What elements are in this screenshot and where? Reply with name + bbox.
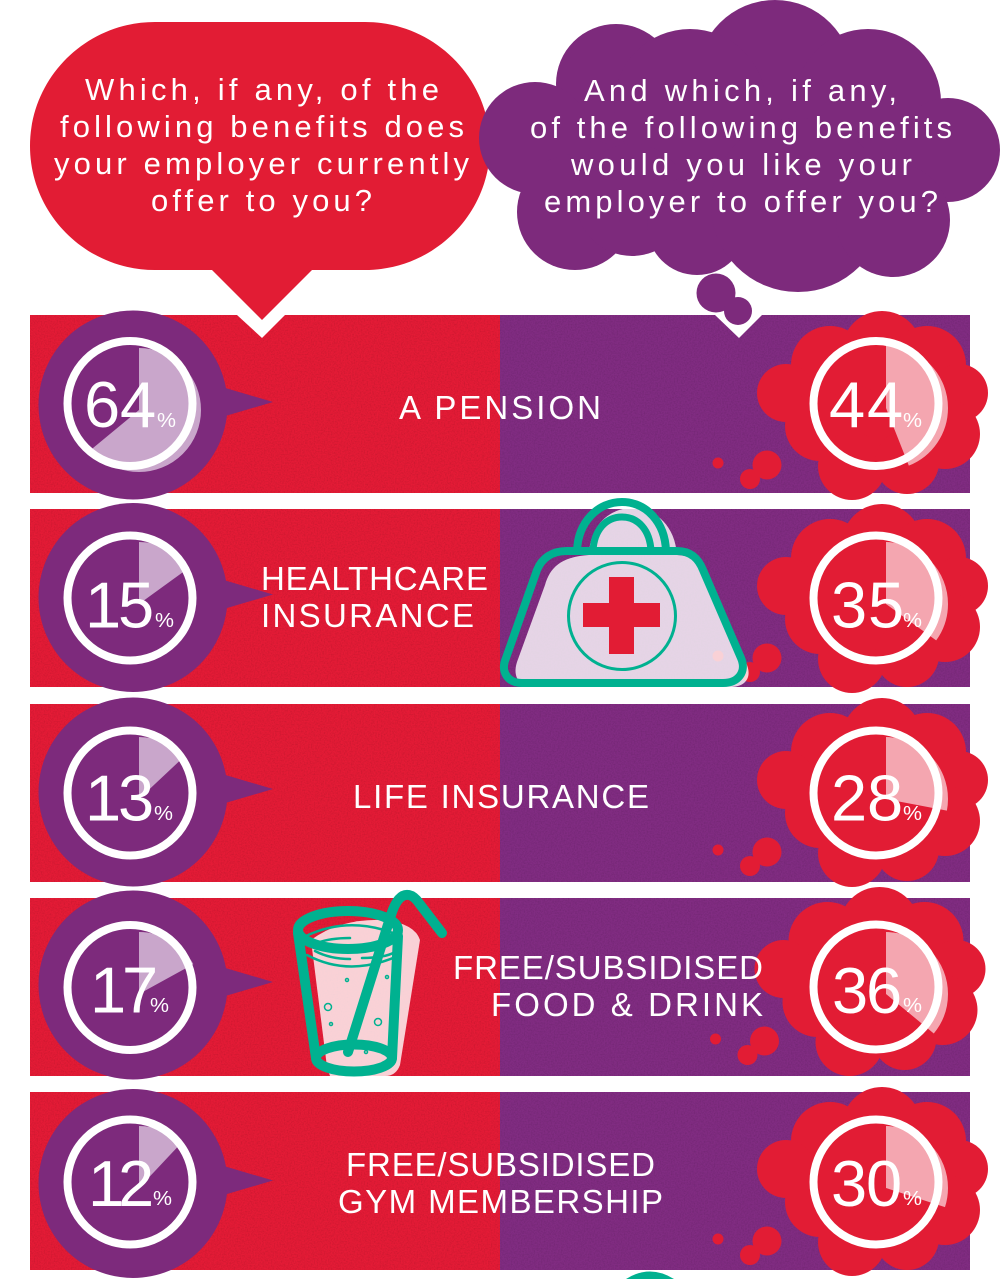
label: free or subsidised food and drink: FREE/SUBSIDISED: [453, 949, 763, 986]
panel: bands background: [30, 315, 970, 1270]
left stat: 64%: 64: [84, 368, 156, 441]
thought cloud: desired benefits question: [479, 0, 1000, 325]
left stat: 13%: [38, 698, 273, 886]
label: free or subsidised gym membership: FREE/SUBSIDISED: [346, 1146, 655, 1183]
question text: employer currently offers: your employer currently: [54, 146, 470, 181]
right stat: 28%: [712, 698, 988, 887]
right stat: 44%: [712, 311, 988, 500]
label: free or subsidised gym membership: [338, 1146, 663, 1220]
left stat: 17%: [38, 890, 273, 1080]
label: free or subsidised food and drink: FOOD & DRINK: [491, 986, 763, 1023]
label: healthcare insurance: INSURANCE: [261, 597, 474, 634]
question text: employer currently offers: [54, 72, 470, 218]
right stat: 36%: 36: [832, 954, 902, 1027]
right stat: 35%: 35: [831, 568, 904, 642]
right stat: 36%: [710, 887, 986, 1076]
row: healthcare insurance: [38, 502, 988, 693]
right stat: 35%: [712, 504, 988, 693]
question text: employer should offer: employer to offer you?: [544, 184, 938, 219]
left stat: 17%: 17: [90, 954, 158, 1027]
left stat: 13%: %: [154, 803, 173, 825]
question text: employer currently offers: Which, if any, of the: [85, 72, 439, 107]
icon: next row green arc: [626, 1272, 674, 1279]
question text: employer should offer: [530, 73, 952, 219]
question text: employer currently offers: offer to you?: [151, 183, 372, 218]
row: gym membership: [38, 1087, 988, 1278]
row: life insurance: [38, 698, 988, 887]
label: free or subsidised food and drink: [453, 949, 763, 1023]
left stat: 12%: [38, 1089, 273, 1278]
right stat: 36%: %: [903, 995, 922, 1017]
speech bubble: current benefits question: [30, 22, 490, 320]
left stat: 64%: [38, 310, 273, 500]
right stat: 28%: %: [903, 803, 922, 825]
icon: medical bag: [504, 502, 749, 687]
label: life insurance: LIFE INSURANCE: [353, 778, 649, 815]
label: healthcare insurance: HEALTHCARE: [261, 560, 488, 597]
right stat: 30%: %: [903, 1188, 922, 1210]
label: a pension: A PENSION: [399, 389, 601, 426]
question text: employer should offer: of the following benefits: [530, 110, 952, 145]
label: healthcare insurance: [261, 560, 488, 634]
left stat: 13%: 13: [85, 762, 154, 834]
right stat: 44%: 44: [829, 368, 903, 441]
left stat: 15%: %: [155, 610, 174, 632]
left stat: 12%: 12: [88, 1147, 154, 1220]
left stat: 12%: %: [153, 1188, 172, 1210]
label: free or subsidised gym membership: GYM MEMBERSHIP: [338, 1183, 663, 1220]
question text: employer currently offers: following benefits does: [60, 109, 464, 144]
icon: glass with straw: [298, 895, 442, 1076]
right stat: 28%: 28: [831, 762, 903, 834]
right stat: 30%: 30: [831, 1147, 902, 1220]
right stat: 35%: %: [903, 610, 922, 632]
left stat: 17%: %: [150, 995, 169, 1017]
right stat: 44%: %: [903, 410, 922, 432]
question text: employer should offer: would you like your: [570, 147, 912, 182]
left stat: 15%: 15: [85, 568, 154, 642]
right stat: 30%: [712, 1087, 988, 1276]
row: food and drink: [38, 887, 986, 1080]
left stat: 15%: [38, 503, 273, 692]
left stat: 64%: %: [157, 410, 176, 432]
question text: employer should offer: And which, if any,: [584, 73, 897, 108]
row: a pension: [38, 310, 988, 500]
